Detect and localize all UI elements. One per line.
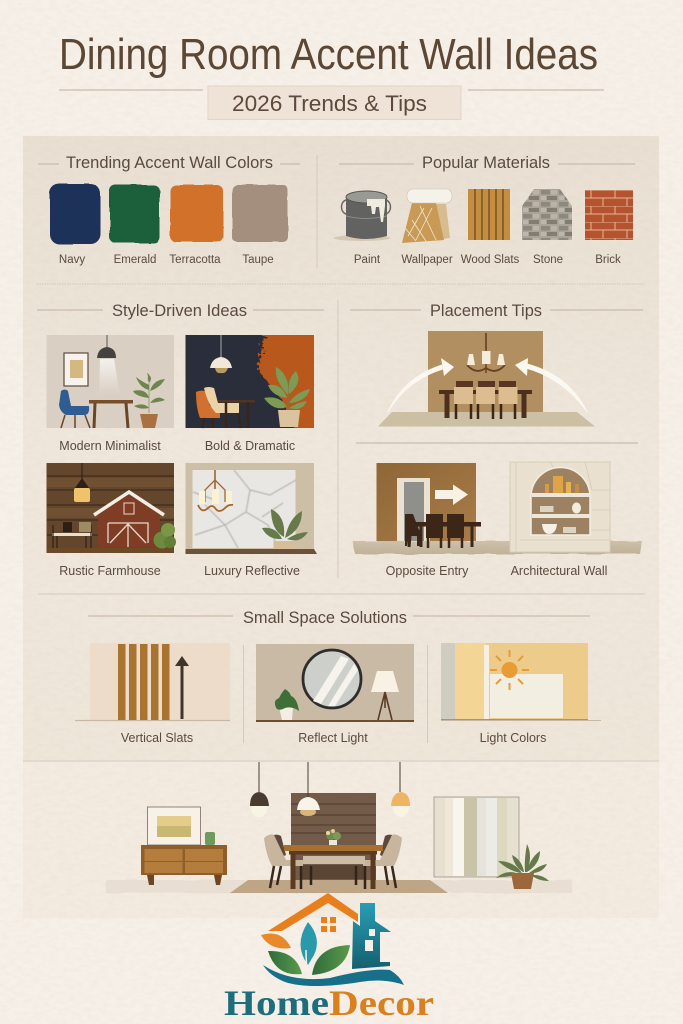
icon: wallpaper roll: Wallpaper	[401, 254, 453, 266]
illustration: modern minimalist	[46, 335, 174, 453]
illustration: rustic farmhouse	[46, 463, 176, 578]
icon: wood slats	[461, 189, 520, 266]
icon: paint can: Paint	[354, 254, 381, 266]
striped panel wall	[434, 797, 519, 877]
swatch: terracotta	[169, 185, 223, 266]
rug	[230, 880, 448, 893]
illustration: vertical slats	[75, 643, 230, 745]
logo chimney and house side	[352, 903, 391, 969]
heading: materials: Popular Materials	[422, 154, 550, 172]
swatch: taupe: Taupe	[242, 254, 274, 266]
heading: placement tips: Placement Tips	[430, 302, 542, 320]
sideboard with art and mug	[141, 807, 227, 885]
icon: wood slats: Wood Slats	[461, 254, 520, 266]
subtitle banner	[59, 86, 604, 120]
pendant lamp: amber	[391, 762, 410, 817]
arrow: left curve	[388, 358, 454, 412]
logo wordmark: Home Decor	[224, 983, 434, 1023]
illustration: modern minimalist: Modern Minimalist	[59, 439, 161, 453]
logo roof	[268, 893, 358, 931]
title: Dining Room Accent Wall Ideas	[59, 30, 598, 79]
swatch: terracotta: Terracotta	[169, 254, 221, 266]
panel: trending accent wall colors	[38, 154, 300, 266]
panel: style-driven ideas	[37, 302, 330, 578]
logo: HomeDecor	[224, 893, 434, 1023]
illustration: light colors: Light Colors	[480, 731, 546, 745]
illustration: luxury reflective	[186, 463, 317, 578]
swatch: emerald	[110, 185, 160, 266]
main panel background	[23, 136, 659, 760]
subtitle banner: 2026 Trends & Tips	[232, 91, 427, 116]
illustration: dining room scene	[23, 760, 659, 893]
swatch: navy: Navy	[59, 254, 85, 266]
panel: placement tips	[350, 302, 643, 578]
illustration: opposite entry: Opposite Entry	[386, 564, 469, 578]
bottom room band background	[23, 760, 659, 918]
dining table with flowers	[284, 829, 383, 889]
illustration: light colors	[441, 643, 601, 745]
illustration: bold and dramatic: Bold & Dramatic	[205, 439, 295, 453]
illustration: architectural wall	[510, 462, 610, 578]
illustration: focal wall with arrows	[378, 331, 595, 426]
wood plank accent wall	[291, 793, 376, 880]
arrow: right curve	[515, 358, 588, 412]
logo leaves	[261, 922, 350, 975]
illustration: architectural wall: Architectural Wall	[511, 564, 607, 578]
illustration: reflect light: Reflect Light	[298, 731, 368, 745]
icon: paint can	[334, 191, 390, 266]
illustration: luxury reflective: Luxury Reflective	[204, 564, 300, 578]
logo window	[321, 917, 336, 932]
logo wave	[263, 965, 404, 986]
icon: stone arch: Stone	[533, 254, 563, 266]
heading: small space solutions: Small Space Solutions	[243, 609, 407, 627]
icon: sun	[490, 650, 529, 690]
pendant lamp: center	[297, 762, 320, 816]
icon: brick wall	[585, 190, 633, 266]
heading: style-driven ideas: Style-Driven Ideas	[112, 302, 247, 320]
illustration: reflect light	[256, 644, 414, 745]
chair: left	[264, 834, 303, 888]
icon: brick wall: Brick	[595, 254, 621, 266]
illustration: vertical slats: Vertical Slats	[121, 731, 193, 745]
potted plant	[496, 844, 549, 889]
illustration: opposite entry	[353, 463, 642, 578]
icon: stone arch	[522, 189, 572, 266]
icon: wallpaper roll	[401, 189, 453, 266]
heading: colors: Trending Accent Wall Colors	[66, 154, 273, 172]
illustration: rustic farmhouse: Rustic Farmhouse	[59, 564, 161, 578]
floor	[106, 880, 572, 893]
swatch: emerald: Emerald	[114, 254, 156, 266]
illustration: bold and dramatic	[186, 335, 314, 450]
swatch: navy	[50, 184, 100, 266]
panel: popular materials	[334, 154, 635, 266]
chair: right	[363, 834, 402, 888]
swatch: taupe	[232, 185, 288, 266]
pendant lamp: dark	[250, 762, 269, 817]
panel: small space solutions	[75, 609, 601, 745]
